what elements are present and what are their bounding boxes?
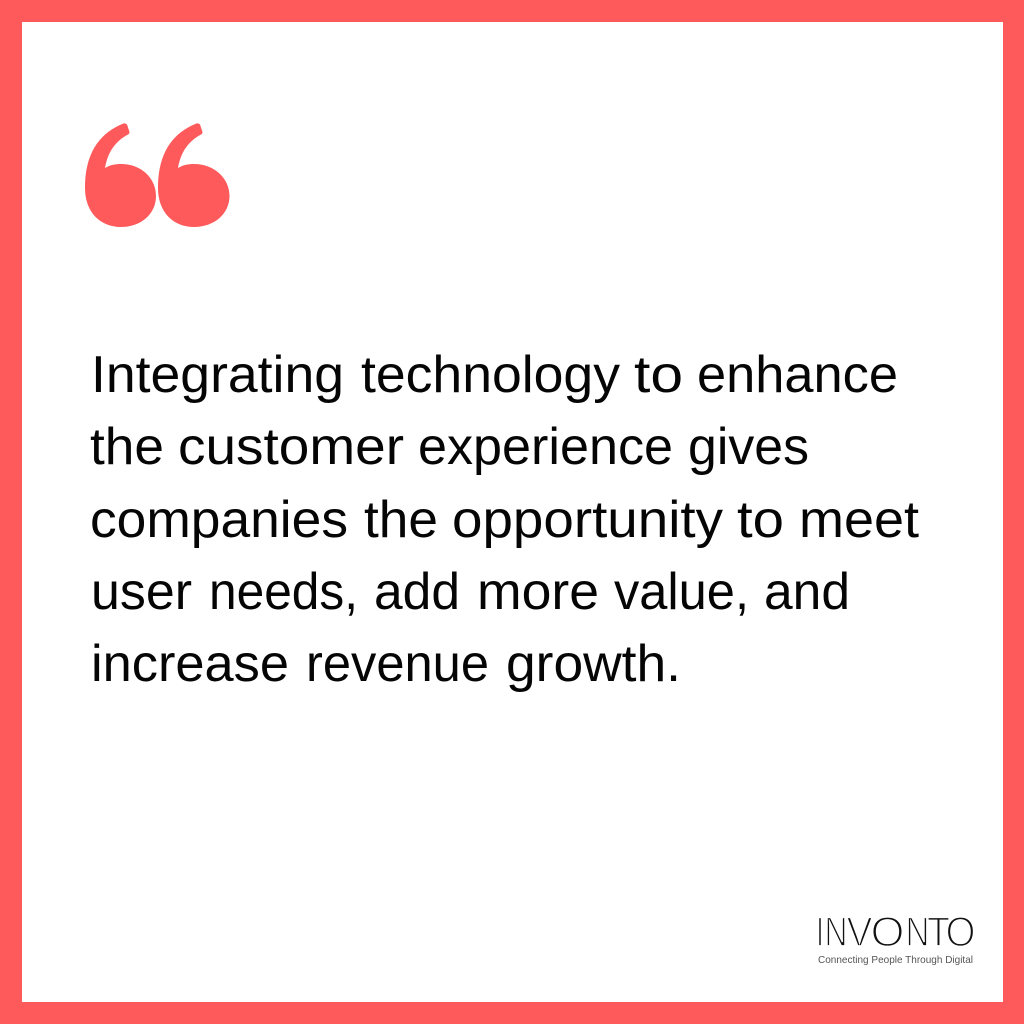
icon: quotation marks xyxy=(85,123,230,227)
quote text: increase xyxy=(91,635,289,693)
logo tagline: Connecting People Through Digital xyxy=(818,954,973,966)
quote text: experience xyxy=(418,418,673,476)
quote text: needs, xyxy=(209,563,358,621)
logo wordmark: I xyxy=(816,908,824,955)
quote text: the xyxy=(90,418,164,476)
quote text: the xyxy=(364,491,438,549)
quote text: Integrating xyxy=(91,346,344,404)
quote text: revenue xyxy=(306,635,489,693)
logo wordmark: T xyxy=(927,908,950,955)
quote text: value, xyxy=(614,563,749,621)
logo wordmark: O xyxy=(870,908,904,955)
quote text: companies xyxy=(90,491,348,549)
quote text: to xyxy=(737,491,784,549)
quote text: growth. xyxy=(506,635,681,693)
quote text: more xyxy=(477,563,599,621)
quote text: to xyxy=(634,346,683,404)
quote text: and xyxy=(764,563,850,621)
logo wordmark: V xyxy=(846,908,872,955)
quote text: customer xyxy=(178,418,404,476)
quote text: meet xyxy=(799,491,920,549)
quote text: opportunity xyxy=(452,491,723,549)
quote text xyxy=(90,346,920,693)
logo wordmark: N xyxy=(824,908,848,955)
logo wordmark: O xyxy=(946,908,976,955)
quote text: add xyxy=(374,563,460,621)
quote text: user xyxy=(91,563,192,621)
quote text: gives xyxy=(688,418,809,476)
quote text: enhance xyxy=(697,346,898,404)
logo wordmark: N xyxy=(906,908,930,955)
quote text: technology xyxy=(361,346,620,404)
logo: Invonto xyxy=(816,908,976,966)
